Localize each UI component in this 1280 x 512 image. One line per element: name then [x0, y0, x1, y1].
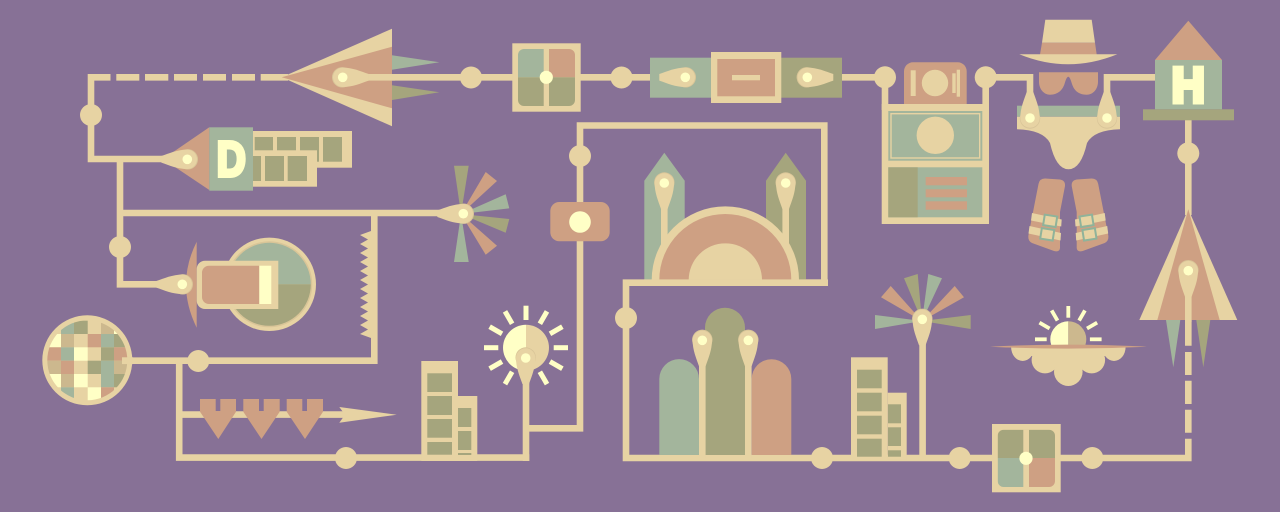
gauge with crescent — [156, 238, 320, 331]
junction nodes — [80, 66, 1199, 469]
building lower left — [421, 361, 477, 461]
arrow with three pennants — [200, 399, 397, 439]
mosaic disc — [42, 315, 133, 405]
building lower centre — [851, 357, 907, 460]
arrow rocket top left — [282, 29, 439, 126]
sunset over cloud — [990, 306, 1147, 386]
figure: left boot — [1028, 178, 1065, 251]
pinwheel centre — [875, 274, 971, 345]
figure: right boot — [1072, 178, 1108, 251]
connector module — [650, 52, 842, 103]
H house — [1143, 21, 1234, 120]
rocket right — [1139, 209, 1237, 367]
figure: hat — [1019, 20, 1117, 64]
pinwheel left — [437, 166, 509, 262]
figure: sunglasses — [1039, 72, 1098, 95]
sawtooth edge — [360, 231, 371, 338]
D tag with blocks: D — [217, 132, 246, 187]
sun — [484, 306, 568, 385]
twin spires and dome — [644, 153, 828, 286]
four-pane window top — [512, 43, 581, 112]
D tag with blocks — [161, 127, 352, 191]
three arches — [659, 308, 791, 458]
H house: H — [1172, 58, 1205, 113]
figure: shorts — [1017, 92, 1120, 169]
connecting wires — [91, 77, 1188, 461]
four-pane window bottom — [992, 424, 1061, 492]
camera block — [550, 202, 610, 241]
control cabinet — [882, 62, 989, 224]
